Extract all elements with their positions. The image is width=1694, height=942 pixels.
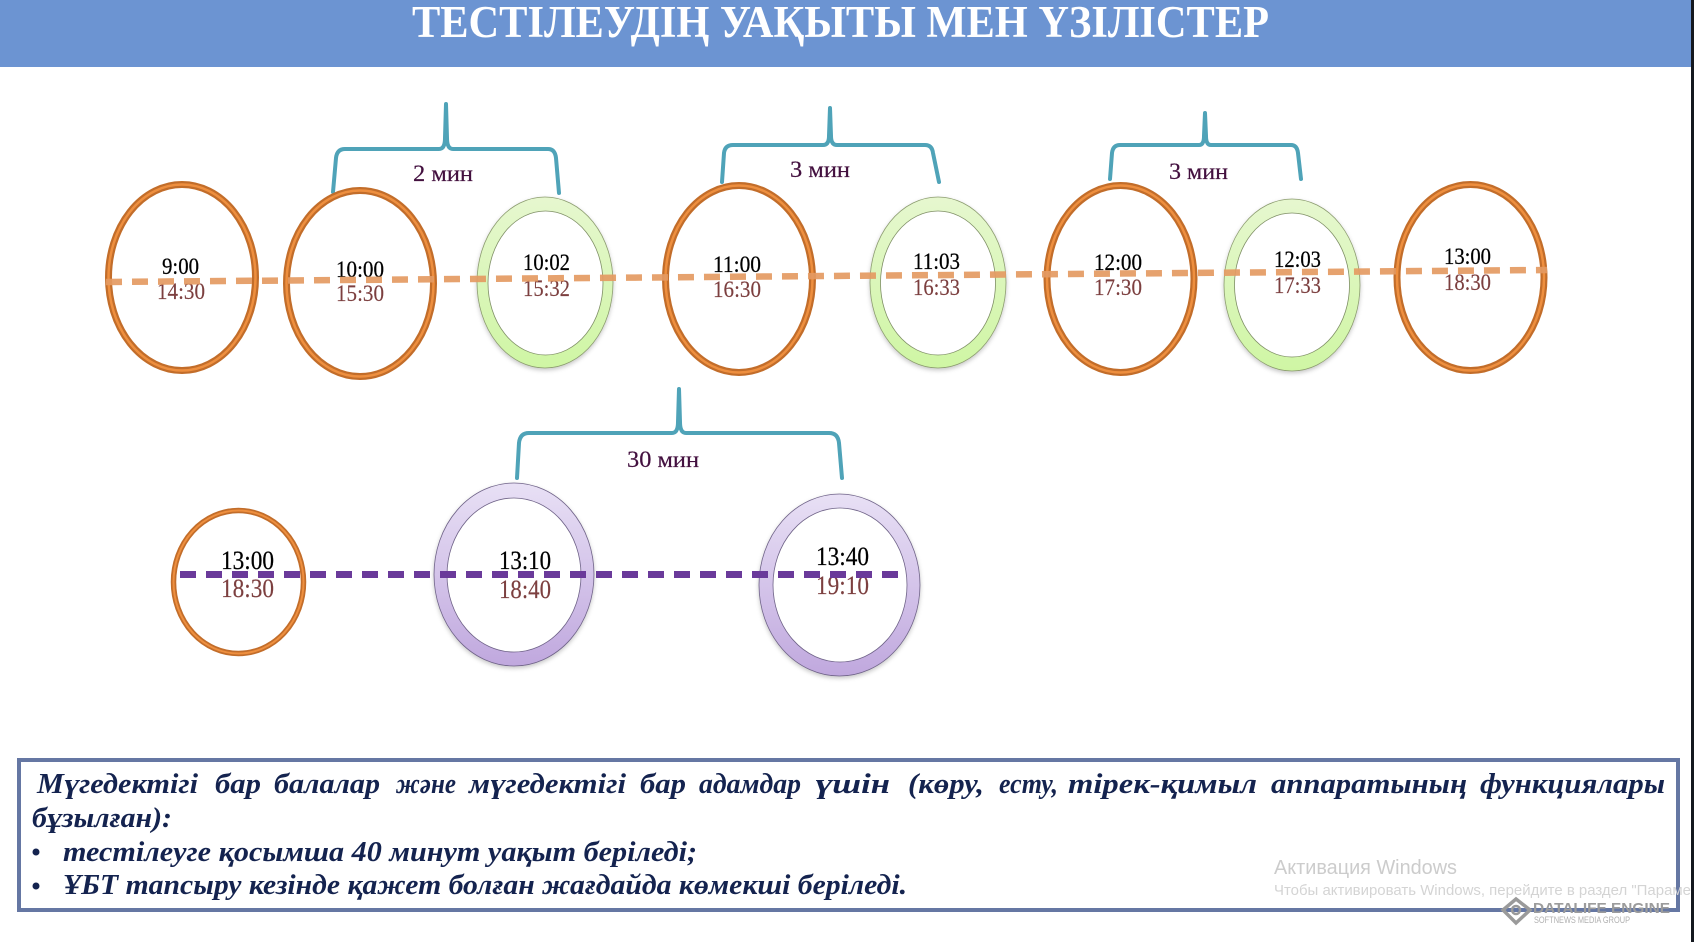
note paragraph line 1: адамдар: [699, 768, 801, 800]
ring 11:03 / 16:33: 11:03: [913, 249, 960, 274]
note paragraph line 1: функциялары: [1480, 768, 1665, 800]
bracket: 2 min: 2 мин: [413, 161, 473, 186]
note paragraph line 1: бар: [215, 768, 261, 800]
circle 9:00 / 14:30: [108, 184, 256, 370]
bullet 2: ҰБТ тапсыру кезінде қажет болған жағдайда көмекші беріледі.: [63, 869, 907, 901]
watermark: Windows activation: Чтобы активировать Windows, перейдите в раздел "Параме: [1274, 882, 1691, 899]
ring 13:10 / 18:40: [434, 483, 594, 666]
circle 9:00 / 14:30: 9:00: [162, 254, 199, 279]
bracket: 2 min: [333, 104, 559, 193]
circle 10:00 / 15:30: 15:30: [336, 281, 384, 306]
dashed timeline: orange: [106, 270, 1547, 282]
circle 13:00 / 18:30: [1397, 184, 1544, 370]
circle 13:00 / 18:30 lower: 18:30: [221, 574, 274, 603]
circle 13:00 / 18:30 lower: 13:00: [221, 546, 274, 575]
note paragraph line 1: бар: [640, 768, 686, 800]
note paragraph line 1: және: [395, 768, 456, 800]
note paragraph line 1: үшін: [815, 768, 890, 800]
ring 12:03 / 17:33: [1224, 199, 1360, 371]
right screen edge: [1691, 0, 1694, 942]
watermark: Datalife Engine logo: DATALIFE ENGINE: [1533, 900, 1670, 917]
circle 12:00 / 17:30: [1047, 186, 1194, 372]
ring 11:03 / 16:33: [870, 197, 1006, 368]
header bar with title: [0, 0, 1691, 67]
ring 10:02 / 15:32: 10:02: [523, 250, 570, 275]
ring 10:02 / 15:32: [477, 197, 613, 368]
ring 12:03 / 17:33: 17:33: [1274, 273, 1321, 298]
bracket: 3 min first: 3 мин: [790, 157, 850, 182]
circle 13:00 / 18:30: 18:30: [1444, 270, 1491, 295]
bracket: 3 min second: 3 мин: [1169, 159, 1228, 184]
ring 12:03 / 17:33: 12:03: [1274, 247, 1321, 272]
ring 11:03 / 16:33: 16:33: [913, 275, 960, 300]
circle 11:00 / 16:30: 11:00: [713, 252, 761, 277]
circle 11:00 / 16:30: 16:30: [713, 277, 761, 302]
note paragraph line 1: мүгедектігі: [468, 768, 626, 800]
bracket: 30 min: 30 мин: [627, 447, 699, 472]
ring 13:10 / 18:40: 18:40: [499, 575, 551, 604]
ring 13:40 / 19:10: [759, 494, 920, 676]
circle 10:00 / 15:30: 10:00: [336, 257, 384, 282]
ring 13:40 / 19:10: 13:40: [816, 542, 869, 571]
note paragraph line 1: (көру,: [908, 768, 984, 800]
ring 13:40 / 19:10: 19:10: [816, 571, 869, 600]
note paragraph line 1: балалар: [274, 768, 380, 800]
watermark: Windows activation: [1274, 857, 1691, 899]
watermark: Datalife Engine logo: [1503, 899, 1670, 926]
circle 10:00 / 15:30: [286, 190, 434, 376]
note paragraph line 1: Мүгедектігі: [36, 768, 198, 800]
watermark: Datalife Engine logo: SOFTNEWS MEDIA GROUP: [1534, 915, 1630, 926]
note paragraph line 1: есту,: [999, 768, 1058, 800]
ring 10:02 / 15:32: 15:32: [523, 276, 570, 301]
bracket: 30 min: [517, 389, 842, 478]
circle 13:00 / 18:30 lower: [174, 510, 304, 654]
circle 12:00 / 17:30: 17:30: [1094, 275, 1142, 300]
dashed timeline: purple: [180, 571, 907, 578]
circle 11:00 / 16:30: [666, 186, 812, 372]
note paragraph line 1: аппаратының: [1271, 768, 1467, 800]
bracket: 3 min first: [722, 108, 939, 182]
ring 13:10 / 18:40: 13:10: [499, 546, 551, 575]
bracket: 3 min second: [1110, 113, 1301, 184]
circle 13:00 / 18:30: 13:00: [1444, 244, 1491, 269]
watermark: Windows activation: Активация Windows: [1274, 857, 1457, 879]
note paragraph line 2: бұзылған):: [32, 802, 172, 834]
circle 12:00 / 17:30: 12:00: [1094, 250, 1142, 275]
circle 9:00 / 14:30: 14:30: [157, 279, 205, 304]
bullet 1: тестілеуге қосымша 40 минут уақыт беріледі;: [63, 836, 697, 868]
note paragraph line 1: тірек-қимыл: [1068, 768, 1257, 800]
note box: [19, 760, 1678, 910]
